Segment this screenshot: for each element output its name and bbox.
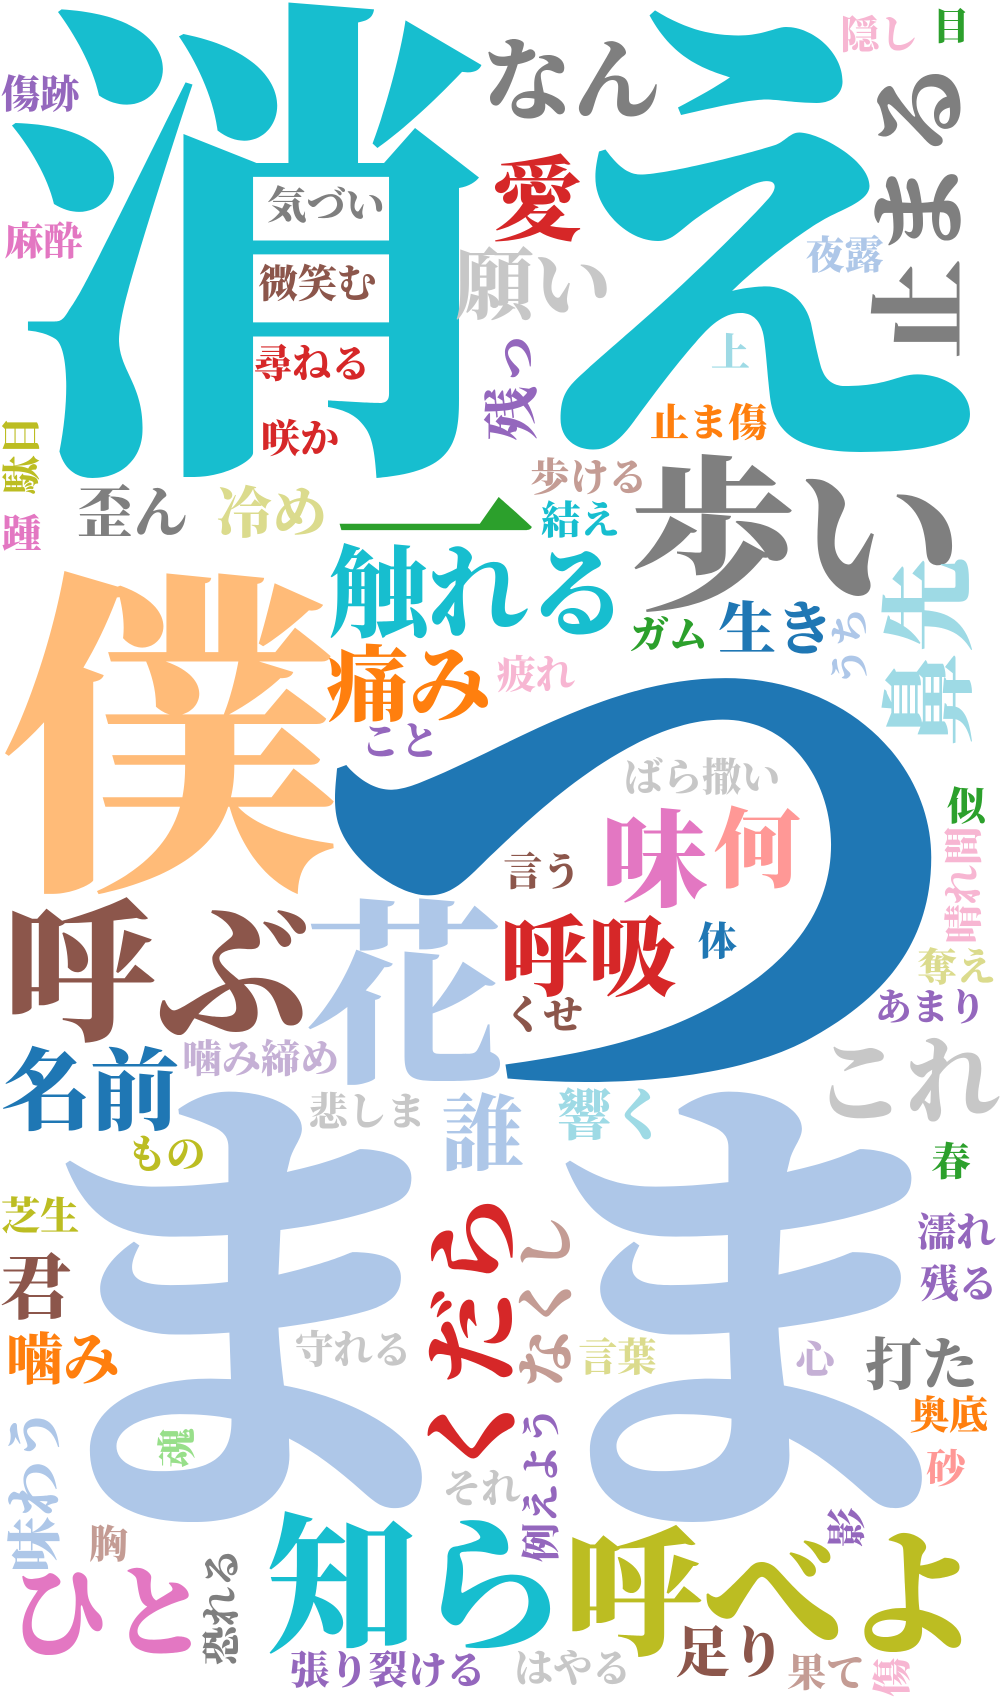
word: 魂: 魂 bbox=[157, 1427, 200, 1467]
word: 守れる: 守れる bbox=[295, 1330, 412, 1373]
word: 影: 影 bbox=[826, 1508, 869, 1547]
word: 奪え: 奪え bbox=[917, 947, 996, 990]
word: 歩ける: 歩ける bbox=[530, 457, 648, 500]
word: なん: なん bbox=[483, 35, 661, 133]
word: 微笑む: 微笑む bbox=[259, 263, 376, 306]
word: あまり: あまり bbox=[875, 987, 986, 1028]
word: 知ら: 知ら bbox=[266, 1506, 566, 1672]
word: もの: もの bbox=[127, 1134, 205, 1177]
word: 砂: 砂 bbox=[926, 1448, 970, 1491]
word: 悲しま: 悲しま bbox=[309, 1092, 426, 1135]
word: 響く: 響く bbox=[557, 1086, 667, 1147]
word: 止まる: 止まる bbox=[866, 59, 977, 359]
word: 例えよう: 例えよう bbox=[521, 1405, 564, 1562]
word: 目: 目 bbox=[933, 7, 970, 48]
word: 張り裂ける: 張り裂ける bbox=[290, 1650, 486, 1693]
word: 奥底: 奥底 bbox=[910, 1395, 988, 1438]
word: 愛: 愛 bbox=[491, 152, 583, 253]
word: 恐れる: 恐れる bbox=[201, 1548, 244, 1665]
word: 呼べよ: 呼べよ bbox=[564, 1521, 982, 1675]
word: 呼吸: 呼吸 bbox=[500, 911, 676, 1008]
word: 君: 君 bbox=[0, 1249, 72, 1329]
word: まま: まま bbox=[0, 1049, 999, 1603]
word: 踵: 踵 bbox=[2, 513, 41, 556]
word: 傷: 傷 bbox=[872, 1658, 915, 1697]
word: 呼ぶ: 呼ぶ bbox=[3, 892, 310, 1062]
word: つ: つ bbox=[302, 510, 970, 1251]
word: それ: それ bbox=[442, 1469, 521, 1512]
word: 気づい: 気づい bbox=[267, 185, 385, 228]
word: 残っ: 残っ bbox=[482, 330, 544, 441]
word: 一: 一 bbox=[334, 428, 536, 652]
word: 消え: 消え bbox=[0, 0, 1000, 539]
word: 歪ん: 歪ん bbox=[77, 484, 188, 545]
word: 果て: 果て bbox=[787, 1652, 865, 1695]
word: 上: 上 bbox=[711, 332, 750, 375]
word: 結え: 結え bbox=[541, 500, 620, 543]
word: 願い: 願い bbox=[455, 242, 612, 329]
word: 駄目: 駄目 bbox=[1, 416, 44, 497]
word: こと: こと bbox=[361, 721, 439, 764]
word: 誰: 誰 bbox=[441, 1089, 524, 1181]
word: 冷め: 冷め bbox=[216, 484, 327, 545]
word: 似: 似 bbox=[947, 786, 989, 829]
word: 心: 心 bbox=[796, 1339, 842, 1382]
word: はやる: はやる bbox=[514, 1648, 632, 1691]
word: 夜露: 夜露 bbox=[805, 234, 884, 278]
word: 咲か: 咲か bbox=[261, 419, 339, 462]
word: なくし: なくし bbox=[516, 1215, 579, 1387]
word: ばら撒い: ばら撒い bbox=[624, 757, 780, 800]
word: 噛み締め: 噛み締め bbox=[183, 1038, 339, 1081]
word: これ: これ bbox=[813, 1033, 1000, 1136]
word: 濡れ: 濡れ bbox=[917, 1212, 996, 1255]
word: 僕: 僕 bbox=[0, 560, 338, 935]
word: 言葉: 言葉 bbox=[578, 1337, 657, 1380]
word: 止ま傷: 止ま傷 bbox=[650, 402, 767, 445]
word: くだら: くだら bbox=[422, 1193, 528, 1480]
word: 噛み: 噛み bbox=[7, 1330, 120, 1392]
word: 傷跡: 傷跡 bbox=[1, 74, 83, 117]
word: 隠し: 隠し bbox=[840, 14, 918, 57]
word: ひと: ひと bbox=[9, 1560, 209, 1671]
word: 残る: 残る bbox=[920, 1262, 998, 1306]
word: 麻酔: 麻酔 bbox=[4, 221, 83, 264]
word: 触れる: 触れる bbox=[328, 540, 628, 651]
word: 芝生: 芝生 bbox=[1, 1196, 79, 1239]
word: くせ: くせ bbox=[504, 995, 583, 1038]
word: 歩い: 歩い bbox=[630, 448, 963, 632]
word: 体: 体 bbox=[698, 921, 737, 964]
word: 痛み: 痛み bbox=[326, 640, 491, 732]
word: 何: 何 bbox=[714, 803, 801, 899]
word: 味: 味 bbox=[601, 804, 708, 922]
word: 花: 花 bbox=[305, 891, 503, 1110]
word: ガム: ガム bbox=[629, 614, 708, 657]
word: 言う: 言う bbox=[503, 851, 582, 894]
word: 胸: 胸 bbox=[89, 1524, 128, 1567]
word: 生き: 生き bbox=[718, 599, 834, 662]
word: 打た: 打た bbox=[865, 1334, 978, 1397]
word: 鼻先: 鼻先 bbox=[880, 558, 984, 747]
word: 味わう: 味わう bbox=[5, 1406, 66, 1572]
word: 名前: 名前 bbox=[1, 1044, 179, 1142]
word: 晴れ間: 晴れ間 bbox=[944, 826, 987, 943]
word: うち: うち bbox=[830, 608, 873, 686]
word: 足り: 足り bbox=[675, 1623, 786, 1684]
word: 疲れ: 疲れ bbox=[497, 655, 575, 698]
word: 尋ねる: 尋ねる bbox=[253, 344, 371, 387]
word: 春: 春 bbox=[932, 1142, 971, 1185]
